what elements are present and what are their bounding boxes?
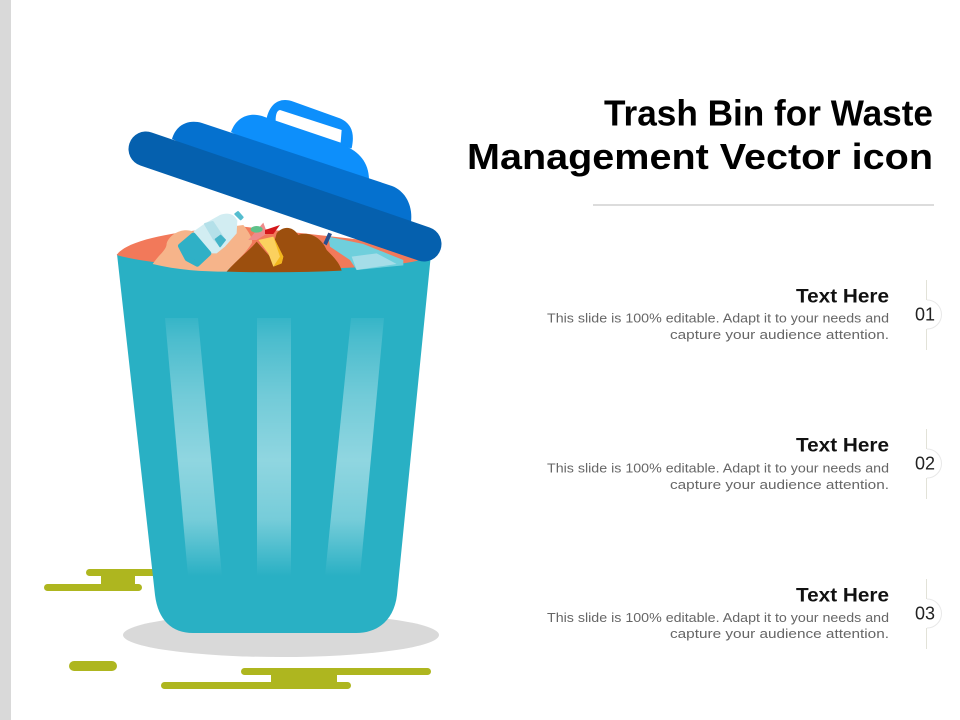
lid top dome <box>231 115 369 180</box>
item 03: Text Here <box>796 586 889 606</box>
bin body <box>117 254 431 633</box>
item 01: 01 <box>915 304 935 324</box>
bin shadow <box>123 613 439 657</box>
plastic wrap <box>328 237 403 270</box>
floor puddle: bottom green streak <box>161 668 431 689</box>
bin rim with garbage <box>117 212 420 272</box>
item 02: capture your audience attention. <box>670 478 889 492</box>
item 02 <box>547 429 942 499</box>
lid middle dome <box>172 122 411 222</box>
title: Management Vector icon <box>467 136 933 177</box>
plastic bottle <box>181 212 243 264</box>
item 02: 02 <box>915 454 935 474</box>
item 03: This slide is 100% editable. Adapt it to your needs and <box>547 611 889 625</box>
food waste <box>227 228 342 272</box>
title <box>467 92 933 177</box>
floor puddle: left green streak <box>44 569 161 591</box>
bin highlight stripes <box>165 318 384 576</box>
item 01 <box>547 280 942 350</box>
item 02: Text Here <box>796 436 889 456</box>
item 03: capture your audience attention. <box>670 627 889 641</box>
trash bin illustration <box>117 212 431 633</box>
left edge strip <box>0 0 11 720</box>
trash bin lid <box>146 100 424 244</box>
item 02: This slide is 100% editable. Adapt it to your needs and <box>547 462 889 476</box>
lid base bar <box>146 149 424 244</box>
divider <box>593 204 934 206</box>
title: Trash Bin for Waste <box>604 92 933 134</box>
item 03 <box>547 579 942 649</box>
floor puddle: small green pill <box>69 661 117 671</box>
item 01: Text Here <box>796 286 889 308</box>
item 01: capture your audience attention. <box>670 328 889 342</box>
lid handle <box>266 100 353 148</box>
item 03: 03 <box>915 604 935 624</box>
item 01: This slide is 100% editable. Adapt it to your needs and <box>547 312 889 326</box>
